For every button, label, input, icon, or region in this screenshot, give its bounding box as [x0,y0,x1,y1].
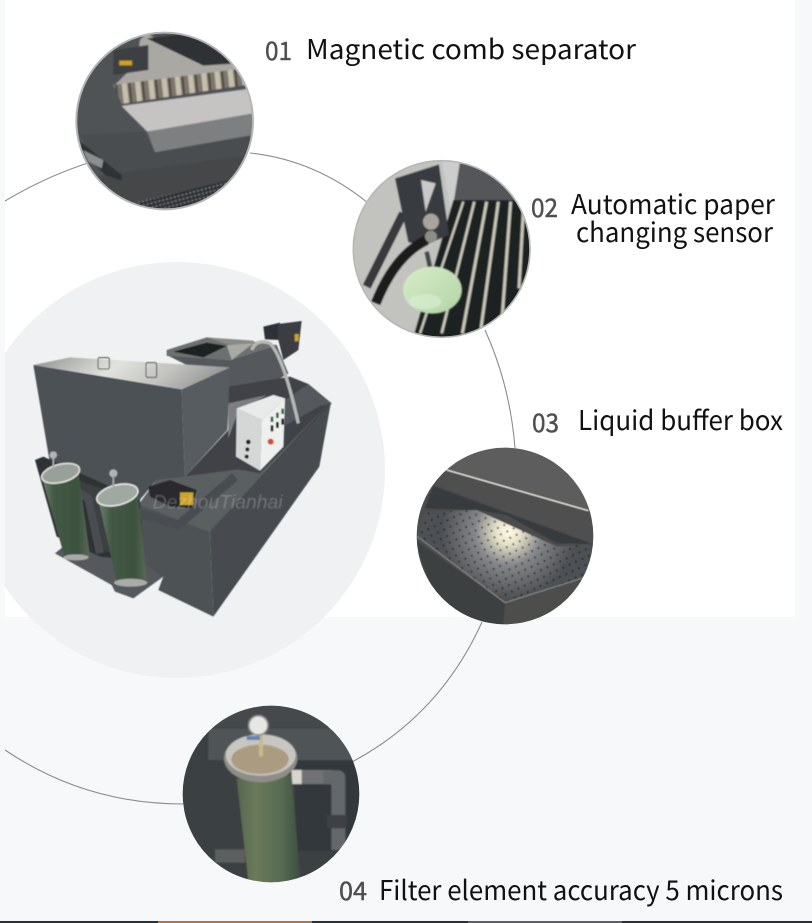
label 03: liquid buffer box: 03 [532,404,559,440]
gear motor with yellow label [148,480,197,508]
hopper box stainless top [33,357,230,389]
connector arcs between callout circles [5,153,515,804]
dark machinery backing [138,377,332,532]
label 03: liquid buffer box: Liquid buffer box [578,399,784,438]
watermark: DezhouTianhai [153,492,283,513]
tank top [138,404,328,532]
tank left face [135,503,213,617]
base plate under filters [55,547,163,598]
tray edge [283,384,332,427]
separator upper unit [167,337,288,388]
large pale circle behind machine [5,262,385,617]
tank right face [210,404,331,617]
hose [252,342,298,423]
main photo: magnetic filtration machine [33,321,332,617]
hopper box right [182,367,230,477]
label 02: automatic paper changing sensor: Automatic paper [571,183,776,222]
label 01: magnetic comb separator: Magnetic comb separator [306,28,637,67]
left filter housing [40,451,90,560]
label 02: automatic paper changing sensor [531,183,776,250]
control box [236,395,285,471]
callout circle 02: paper changing float sensor [352,158,532,342]
bottom colour strip [0,921,812,923]
label 04: filter element accuracy: 04 [339,872,367,908]
right filter housing [95,469,147,587]
motor [263,321,302,360]
callout circle 04: filter housing with pressure gauge [180,703,363,887]
panel strip between filters [78,480,143,562]
label 02: automatic paper changing sensor: changing sensor [576,211,773,250]
callout circle 01: magnetic comb close-up [73,30,257,213]
mesh tray behind control box [228,395,267,438]
white upper panel [5,0,795,617]
label 02: automatic paper changing sensor: 02 [531,189,558,225]
callout circle 03: liquid buffer box perforated plate [413,445,597,628]
hopper box front [33,365,185,502]
label 04: filter element accuracy: Filter element accuracy 5 microns [379,869,783,908]
pipework [133,477,235,525]
label 01: magnetic comb separator: 01 [265,32,292,68]
rear panel behind filters [35,457,143,562]
